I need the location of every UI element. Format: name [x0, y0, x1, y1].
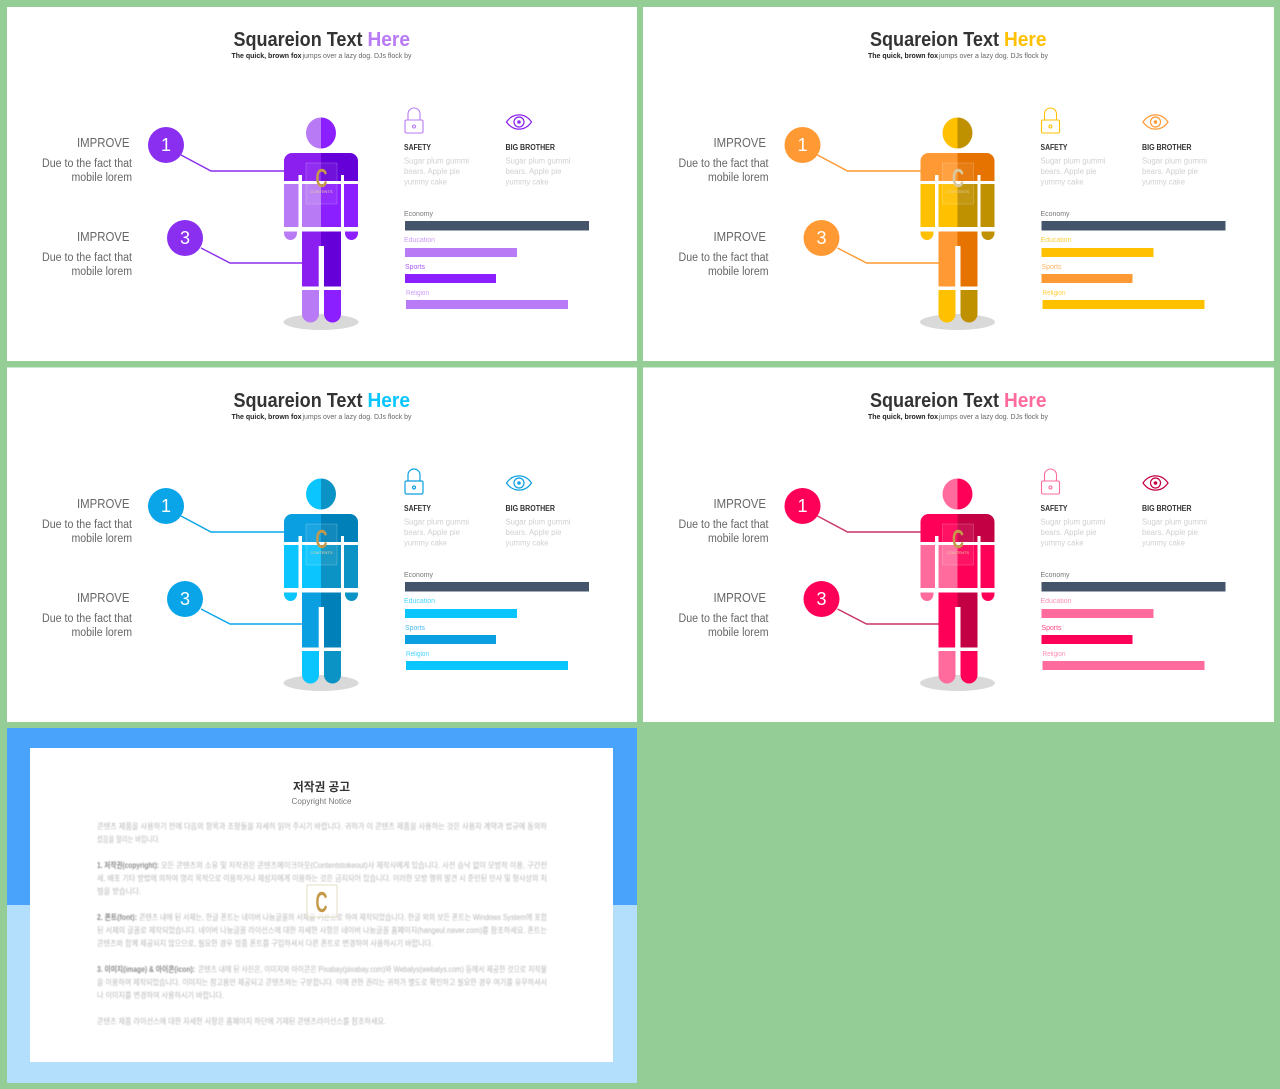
panel: pink slide: [643, 368, 1274, 722]
text block: copyright: 1. 저작권(copyright):: [97, 860, 159, 870]
text block: big brother: yummy cake: [506, 538, 549, 548]
subtitle: The quick, brown fox: [868, 414, 938, 421]
callout 3 marker: 3: [816, 228, 827, 248]
text block: big brother: Sugar plum gummi: [1142, 518, 1207, 526]
icon: eye: [1143, 115, 1168, 129]
callout 1 text: [42, 135, 133, 184]
watermark: C: [952, 524, 964, 554]
text block: safety: yummy cake: [404, 538, 448, 548]
callout 3 text: Due to the fact that: [678, 252, 769, 264]
title: Here: [368, 390, 410, 412]
callout 1 text: Due to the fact that: [678, 158, 769, 170]
bar chart: Economy: [1040, 211, 1070, 218]
bar chart: Sports: [1042, 264, 1062, 271]
text block: big brother: BIG BROTHER: [506, 504, 555, 513]
callout 3 marker: 3: [816, 589, 827, 609]
text block: image and icon: 콘텐츠 내에 된 사진은, 이미지와 아이콘은 Pixabay(pixabay.com)와 Webalys(webalys.com) 등에서 제공한 것으로 저작물: [198, 964, 547, 974]
subtitle: jumps over a lazy dog. DJs flock by: [938, 414, 1048, 421]
bar chart: [1040, 572, 1226, 670]
icon: eye: [506, 476, 532, 490]
text block: big brother: bears. Apple pie: [1142, 528, 1199, 537]
text block: safety: bears. Apple pie: [404, 167, 461, 176]
bar chart: Religion: [1042, 651, 1066, 658]
bar chart: Education: [404, 237, 435, 244]
watermark: [307, 885, 337, 919]
text block: intro: 셨음을 알리는 바입니다.: [97, 834, 160, 844]
text block: safety: Sugar plum gummi: [404, 518, 469, 526]
text block: font: 콘텐츠 내에 된 서체는, 한글 폰트는 네이버 나눔글꼴의 서체를 기본으로 하여 제작되었습니다. 한글 외의 보든 폰트는 Windows System에 포함: [139, 912, 548, 922]
callout 1 marker: 1: [797, 496, 808, 516]
panel: copyright notice: [7, 728, 637, 1083]
callout 3 text: [42, 229, 133, 278]
text block: copyright: 세, 배포 기타 방법에 의하여 영리 목적으로 이용하거나 제삼자에게 이용하는 것은 금지되어 있습니다. 이러한 모방 행위 발견 시 준민된 민사 및 형사상의 처: [97, 873, 547, 883]
callout 1 text: Due to the fact that: [42, 158, 133, 170]
bar chart: Economy: [404, 211, 433, 218]
watermark: [942, 524, 974, 565]
text block: big brother: yummy cake: [1142, 178, 1186, 186]
callout 3 text: mobile lorem: [708, 266, 768, 278]
text block: image and icon: [97, 964, 547, 1000]
callout 3 text: [678, 590, 769, 639]
watermark: [306, 524, 337, 565]
text block: safety: [1040, 504, 1106, 548]
text block: big brother: [1142, 504, 1207, 548]
subtitle: jumps over a lazy dog. DJs flock by: [302, 414, 412, 421]
callout 1 text: mobile lorem: [708, 172, 768, 184]
panel: blue slide: [7, 368, 637, 722]
bar chart: Religion: [406, 290, 429, 297]
text block: big brother: [506, 504, 571, 548]
text block: intro: [97, 821, 548, 844]
text block: image and icon: 3. 이미지(image) & 아이콘(icon):: [97, 964, 195, 974]
callout 3 marker: [804, 220, 940, 263]
text block: big brother: yummy cake: [1142, 538, 1186, 548]
text block: image and icon: 을 이용하여 제작되었습니다. 이미지는 참고용만 제공되고 콘텐츠와는 구분합니다. 이에 관한 권리는 귀하가 별도로 확인하고 필요한 경우 여기를 유무하셔서: [97, 977, 547, 987]
text block: big brother: [1142, 143, 1207, 186]
bar chart: Sports: [405, 625, 425, 632]
callout 1 text: mobile lorem: [72, 172, 132, 184]
human figure: [284, 478, 358, 691]
text block: big brother: bears. Apple pie: [1142, 167, 1199, 176]
text block: big brother: [506, 143, 571, 186]
text block: safety: [404, 504, 469, 548]
subtitle: jumps over a lazy dog. DJs flock by: [302, 53, 412, 60]
text block: copyright: 벌을 받습니다.: [97, 886, 141, 896]
icon: lock: [405, 469, 423, 494]
subtitle: The quick, brown fox: [232, 53, 302, 60]
icon: lock: [1042, 469, 1060, 494]
heading: 저작권 공고: [293, 779, 350, 794]
callout 1 marker: 1: [161, 496, 171, 516]
title: Here: [368, 29, 410, 51]
text block: safety: Sugar plum gummi: [1040, 518, 1106, 526]
text block: font: 콘텐츠와 함께 제공되지 않으므로, 필요한 경우 정품 폰트를 구입하셔서 다른 폰트로 변경하여 사용하시기 바랍니다.: [97, 938, 433, 948]
callout 1 text: IMPROVE: [77, 135, 130, 150]
callout 3 text: Due to the fact that: [42, 252, 133, 264]
text block: big brother: Sugar plum gummi: [506, 156, 571, 166]
callout 1 marker: [784, 488, 922, 532]
watermark: CONTENTS: [310, 550, 333, 555]
callout 1 text: [678, 135, 769, 184]
panel: orange slide: [643, 7, 1274, 361]
subtitle: The quick, brown fox: [868, 53, 938, 60]
text block: big brother: BIG BROTHER: [506, 143, 555, 152]
text block: font: 2. 폰트(font):: [97, 913, 137, 922]
bar chart: Sports: [1042, 625, 1062, 632]
bar chart: Education: [1040, 237, 1072, 244]
text block: safety: Sugar plum gummi: [404, 156, 469, 166]
text block: image and icon: 나 이미지를 변경하여 사용하시기 바랍니다.: [97, 990, 224, 1000]
watermark: C: [316, 887, 328, 919]
text block: big brother: yummy cake: [506, 178, 549, 186]
callout 3 text: mobile lorem: [72, 266, 132, 278]
subtitle: [868, 414, 1048, 421]
bar chart: Sports: [405, 264, 425, 271]
callout 3 text: IMPROVE: [714, 229, 766, 244]
heading: [292, 779, 352, 806]
callout 1 text: [678, 496, 769, 545]
callout 1 text: mobile lorem: [72, 533, 132, 545]
watermark: [306, 163, 337, 204]
text block: safety: [404, 143, 469, 186]
subtitle: [868, 53, 1048, 60]
callout 3 text: Due to the fact that: [678, 613, 769, 625]
callout 3 text: mobile lorem: [72, 627, 132, 639]
callout 1 marker: [148, 127, 285, 171]
watermark: CONTENTS: [947, 550, 969, 555]
callout 3 marker: [804, 581, 940, 624]
icon: eye: [1143, 476, 1168, 490]
text block: license footer: 콘텐츠 제품 라이선스에 대한 자세한 사항은 홈페이지 하단에 기재된 콘텐츠라이선스를 참조하세요.: [97, 1016, 386, 1026]
bar chart: Religion: [1042, 290, 1066, 297]
bar chart: Religion: [406, 651, 429, 658]
callout 1 text: IMPROVE: [714, 496, 766, 511]
text block: font: 된 서체의 글꼴로 제작되었습니다. 네이버 나눔글꼴 라이선스에 대한 자세한 사항은 네이버 나눔글꼴 홈페이지(hangeul.naver.com)를 참조하세요. 폰트는: [97, 925, 547, 935]
callout 3 text: Due to the fact that: [42, 613, 133, 625]
title: Here: [1004, 390, 1046, 412]
callout 3 marker: 3: [180, 228, 190, 248]
bar chart: Education: [1040, 598, 1072, 605]
callout 1 marker: 1: [797, 135, 808, 155]
title: Squareion Text: [234, 29, 363, 51]
text block: intro: 콘텐츠 제품을 사용하기 전에 다음의 항목과 조항들을 자세히 읽어 주시기 바랍니다. 귀하가 이 콘텐츠 제품을 사용하는 것은 사용자 계약과 법규에 동의하: [97, 821, 548, 831]
icon: lock: [405, 108, 423, 133]
title: Squareion Text: [870, 29, 999, 51]
subtitle: [232, 53, 412, 60]
title: Squareion Text: [870, 390, 999, 412]
text block: font: [97, 912, 548, 948]
text block: copyright: [97, 860, 547, 896]
text block: safety: bears. Apple pie: [1040, 167, 1097, 176]
text block: safety: SAFETY: [1040, 143, 1068, 152]
text block: safety: SAFETY: [404, 504, 432, 513]
watermark: [942, 163, 974, 204]
text block: big brother: Sugar plum gummi: [506, 518, 571, 526]
title: Here: [1004, 29, 1046, 51]
text block: big brother: BIG BROTHER: [1142, 143, 1192, 152]
text block: big brother: BIG BROTHER: [1142, 504, 1192, 513]
human figure: [284, 118, 358, 330]
callout 1 text: IMPROVE: [714, 135, 766, 150]
text block: copyright: 모든 콘텐츠의 소유 및 저작권은 콘텐츠메이크아웃(Contentstokeout)사 제작사에게 있습니다. 사전 승낙 없이 모방적 이용, 구간전: [161, 860, 547, 870]
callout 3 text: IMPROVE: [77, 590, 130, 605]
subtitle: The quick, brown fox: [232, 414, 302, 421]
human figure: [920, 118, 995, 330]
callout 3 text: IMPROVE: [77, 229, 130, 244]
watermark: C: [316, 163, 328, 193]
callout 3 text: IMPROVE: [714, 590, 766, 605]
icon: lock: [1042, 108, 1060, 133]
text block: big brother: bears. Apple pie: [506, 167, 562, 176]
callout 1 marker: [148, 488, 285, 532]
callout 1 marker: 1: [161, 135, 171, 155]
bar chart: Education: [404, 598, 435, 605]
callout 1 text: [42, 496, 133, 545]
text block: safety: bears. Apple pie: [1040, 528, 1097, 537]
text block: safety: bears. Apple pie: [404, 528, 461, 537]
callout 1 text: mobile lorem: [708, 533, 768, 545]
callout 3 marker: [167, 220, 303, 263]
watermark: CONTENTS: [947, 189, 969, 194]
text block: safety: SAFETY: [1040, 504, 1068, 513]
text block: safety: Sugar plum gummi: [1040, 156, 1106, 166]
watermark: CONTENTS: [310, 189, 333, 194]
callout 3 marker: [167, 581, 303, 624]
callout 1 text: Due to the fact that: [42, 519, 133, 531]
bar chart: [1040, 211, 1226, 309]
heading: Copyright Notice: [292, 796, 352, 806]
human figure: [920, 478, 995, 691]
title: Squareion Text: [234, 390, 363, 412]
callout 1 marker: [784, 127, 922, 171]
text block: big brother: bears. Apple pie: [506, 528, 562, 537]
callout 3 text: [678, 229, 769, 278]
bar chart: Economy: [404, 572, 433, 579]
callout 3 marker: 3: [180, 589, 190, 609]
text block: safety: yummy cake: [1040, 178, 1084, 186]
watermark: C: [952, 163, 964, 193]
callout 3 text: mobile lorem: [708, 627, 768, 639]
panel: purple slide: [7, 7, 637, 361]
subtitle: jumps over a lazy dog. DJs flock by: [938, 53, 1048, 60]
text block: big brother: Sugar plum gummi: [1142, 156, 1207, 166]
callout 3 text: [42, 590, 133, 639]
callout 1 text: IMPROVE: [77, 496, 130, 511]
subtitle: [232, 414, 412, 421]
text block: safety: SAFETY: [404, 143, 432, 152]
text block: safety: [1040, 143, 1106, 186]
bar chart: [404, 211, 589, 309]
icon: eye: [506, 115, 532, 129]
bar chart: [404, 572, 589, 670]
text block: safety: yummy cake: [404, 178, 448, 186]
text block: safety: yummy cake: [1040, 538, 1084, 548]
callout 1 text: Due to the fact that: [678, 519, 769, 531]
bar chart: Economy: [1040, 572, 1070, 579]
watermark: C: [316, 524, 328, 554]
